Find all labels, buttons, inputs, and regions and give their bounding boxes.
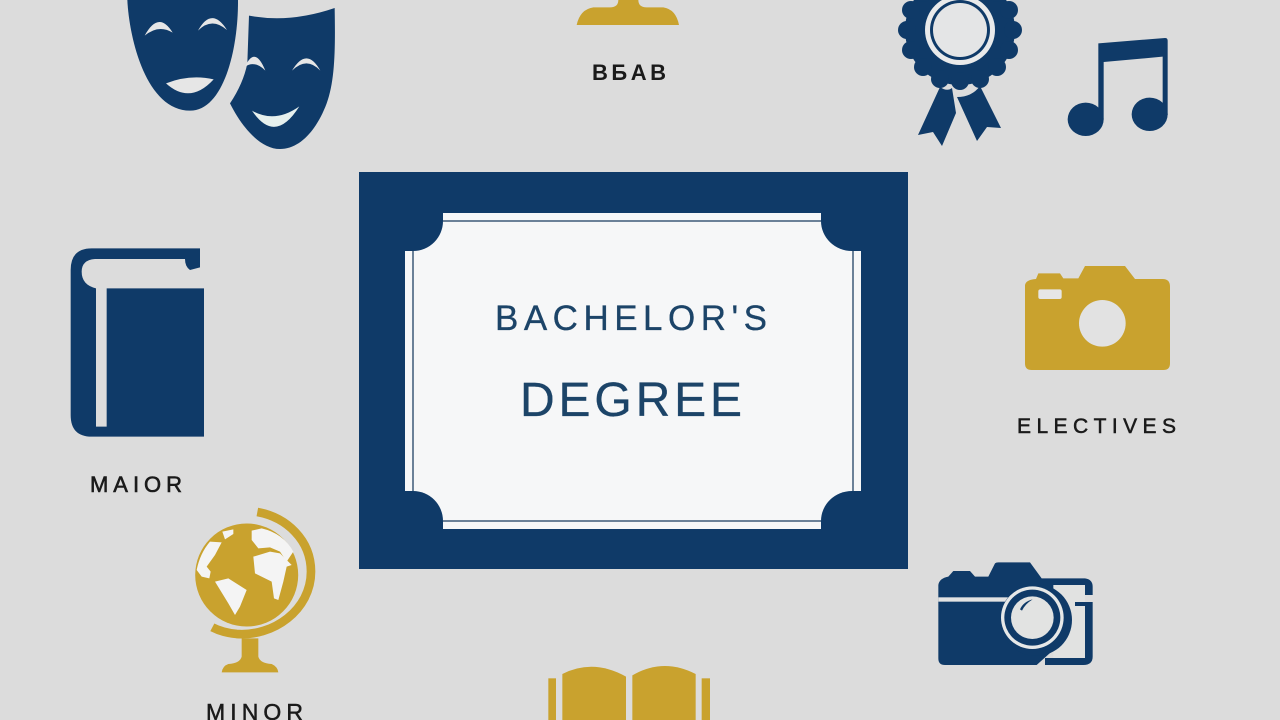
- certificate title line 2: DEGREE: [520, 374, 742, 427]
- panel: certificate: [359, 172, 908, 569]
- continents: [197, 528, 293, 615]
- globe sphere: [195, 524, 298, 626]
- body divider: [938, 597, 1008, 602]
- certificate frame: [359, 172, 908, 569]
- icon: trophy base: [577, 0, 679, 25]
- lens glass: [1011, 596, 1054, 639]
- right mask: [230, 8, 335, 149]
- lens outer ring: [1001, 586, 1064, 649]
- left mask: [127, 0, 238, 111]
- icon: open book: [548, 666, 710, 720]
- label: electives: ELECTIVES: [1017, 415, 1176, 438]
- lens highlight: [1020, 599, 1033, 611]
- icon: music note: [1068, 38, 1168, 136]
- icon: navy camera: [938, 562, 1093, 665]
- icon: gold camera: [1025, 266, 1170, 370]
- lens barrel: [1004, 590, 1060, 646]
- ribbon tails: [918, 86, 1001, 146]
- viewfinder interior: [1053, 585, 1085, 658]
- scalloped seal: [898, 0, 1022, 90]
- corner ornaments: [405, 213, 861, 529]
- globe meridian arc: [212, 512, 311, 634]
- lens housing: [1000, 584, 1072, 656]
- lower right frame: [1045, 602, 1093, 665]
- camera body: [938, 562, 1093, 665]
- certificate title line 1: BACHELOR'S: [495, 299, 767, 338]
- icon: closed book: [71, 248, 204, 437]
- label: major: MAIOR: [90, 472, 182, 497]
- label: top centre: BБAB: [592, 60, 666, 85]
- icon: theatre masks: [127, 0, 335, 149]
- inner rule lines: [413, 221, 853, 521]
- seal rings: [925, 0, 995, 65]
- icon: rosette award: [898, 0, 1022, 146]
- icon: globe: [195, 512, 311, 672]
- certificate paper: [405, 213, 861, 529]
- globe stand: [222, 638, 278, 672]
